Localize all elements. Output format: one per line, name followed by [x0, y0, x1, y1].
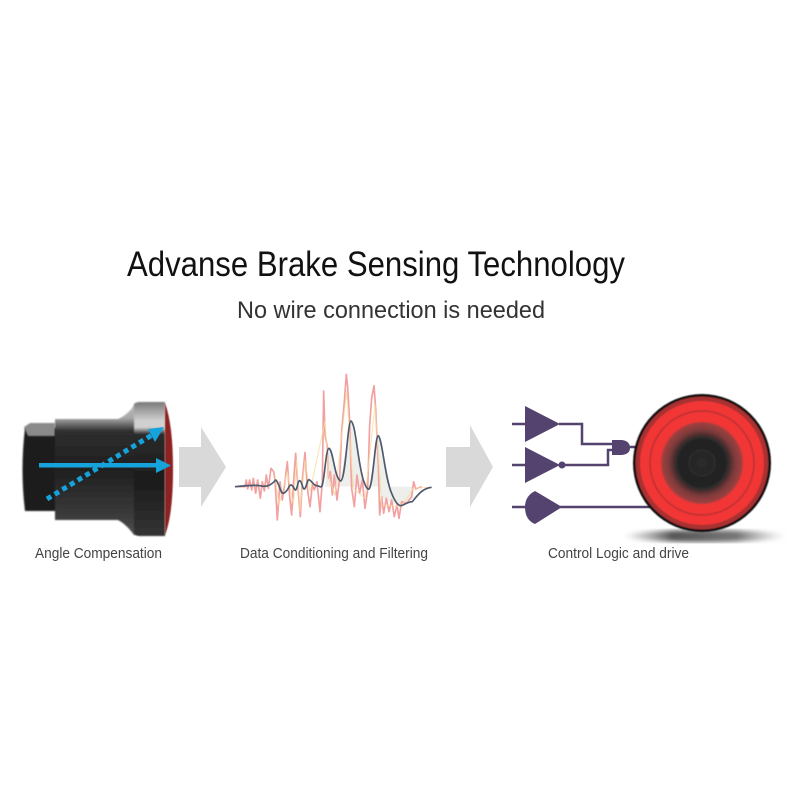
icon: sensor body with angle arrows [22, 402, 173, 536]
shadow under lamp [623, 530, 787, 542]
chart: filtered signal waveform [235, 374, 432, 520]
arrow 2 [446, 425, 493, 507]
title: Advanse Brake Sensing Technology [127, 244, 625, 284]
dotted blue arrow [47, 427, 164, 499]
solid blue arrow [39, 458, 171, 473]
caption: data conditioning: Data Conditioning and Filtering [240, 546, 428, 562]
arrow 1 [179, 427, 226, 507]
subtitle: No wire connection is needed [237, 297, 545, 324]
AND gate [612, 440, 630, 455]
logic circuit diagram [512, 406, 650, 524]
caption: angle compensation: Angle Compensation [35, 546, 162, 562]
buffer gate 1 [525, 406, 560, 442]
inverter gate [525, 447, 566, 483]
caption: control logic: Control Logic and drive [548, 546, 689, 562]
icon: red tail light [633, 394, 771, 532]
driver gate [525, 491, 562, 524]
